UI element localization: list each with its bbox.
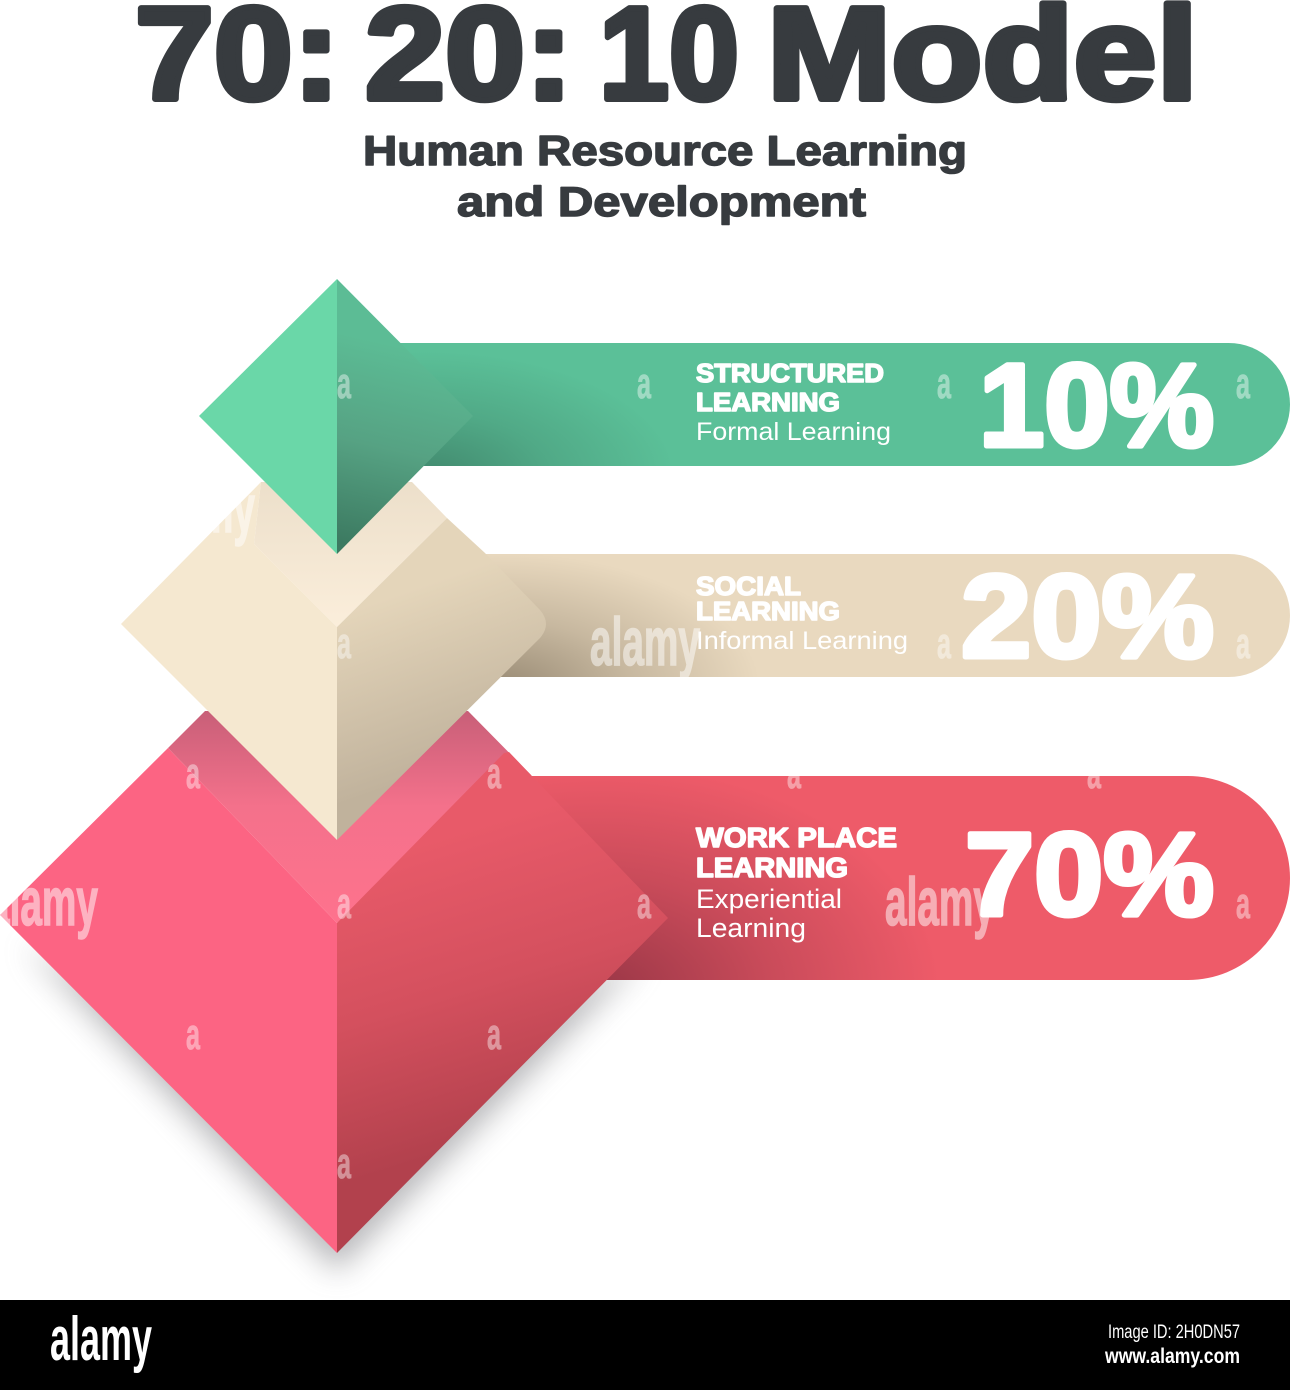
label: structured learning: Formal Learning <box>696 418 891 446</box>
watermark: a <box>186 1010 200 1059</box>
label: social learning: Informal Learning <box>696 627 908 655</box>
watermark <box>0 359 1250 1188</box>
watermark: a <box>1236 359 1250 408</box>
label: workplace learning: Learning <box>696 913 806 943</box>
watermark: alamy <box>885 864 995 940</box>
image id: Image ID: 2H0DN57 <box>1108 1322 1240 1343</box>
beige recess facet <box>254 482 447 627</box>
subtitle: and Development <box>457 178 866 225</box>
value: 10%: 10% <box>979 340 1214 472</box>
shadow under red pyramid <box>25 945 645 1272</box>
pyramid tier: red base <box>0 711 668 1253</box>
watermark: a <box>337 619 351 668</box>
watermark: a <box>337 359 351 408</box>
label: structured learning <box>696 358 891 446</box>
label: social learning: LEARNING <box>696 596 840 626</box>
title <box>135 0 1198 127</box>
watermark: a <box>1236 879 1250 928</box>
watermark: a <box>1236 619 1250 668</box>
green left facet <box>199 279 337 554</box>
red recess facet <box>168 711 531 923</box>
label: workplace learning: WORK PLACE <box>696 822 897 853</box>
beige left facet <box>121 482 337 840</box>
watermark: a <box>937 619 951 668</box>
watermark: a <box>337 879 351 928</box>
watermark: a <box>937 359 951 408</box>
label: workplace learning: LEARNING <box>696 852 848 883</box>
subtitle <box>363 127 967 225</box>
watermark: a <box>337 1139 351 1188</box>
value: 70%: 70% <box>965 809 1214 941</box>
footer logo: alamy <box>50 1305 152 1374</box>
footer bar <box>0 1300 1290 1390</box>
bar: workplace learning 70% <box>500 776 1290 980</box>
website: www.alamy.com <box>1104 1345 1240 1368</box>
bar: social learning 20% <box>470 554 1290 677</box>
label: structured learning: LEARNING <box>696 387 840 417</box>
label: workplace learning <box>696 822 897 943</box>
red right facet <box>337 752 668 1253</box>
pyramid tier: beige middle <box>121 482 546 840</box>
watermark: a <box>787 749 801 798</box>
label: social learning <box>696 571 908 655</box>
red left facet <box>0 748 337 1253</box>
label: social learning: SOCIAL <box>696 571 801 601</box>
label: workplace learning: Experiential <box>696 884 842 914</box>
watermark: a <box>487 749 501 798</box>
value: 20%: 20% <box>961 551 1214 683</box>
watermark: alamy <box>590 604 700 680</box>
bar: structured learning 10% <box>390 343 1290 466</box>
subtitle: Human Resource Learning <box>363 127 967 174</box>
watermark: a <box>487 1010 501 1059</box>
pyramid tier: green top <box>199 279 473 554</box>
beige right facet <box>337 518 546 840</box>
watermark: a <box>1087 749 1101 798</box>
green right facet <box>337 279 473 554</box>
label: structured learning: STRUCTURED <box>696 358 884 388</box>
watermark: alamy <box>145 471 255 547</box>
watermark: a <box>637 879 651 928</box>
watermark: a <box>637 359 651 408</box>
watermark: a <box>186 749 200 798</box>
